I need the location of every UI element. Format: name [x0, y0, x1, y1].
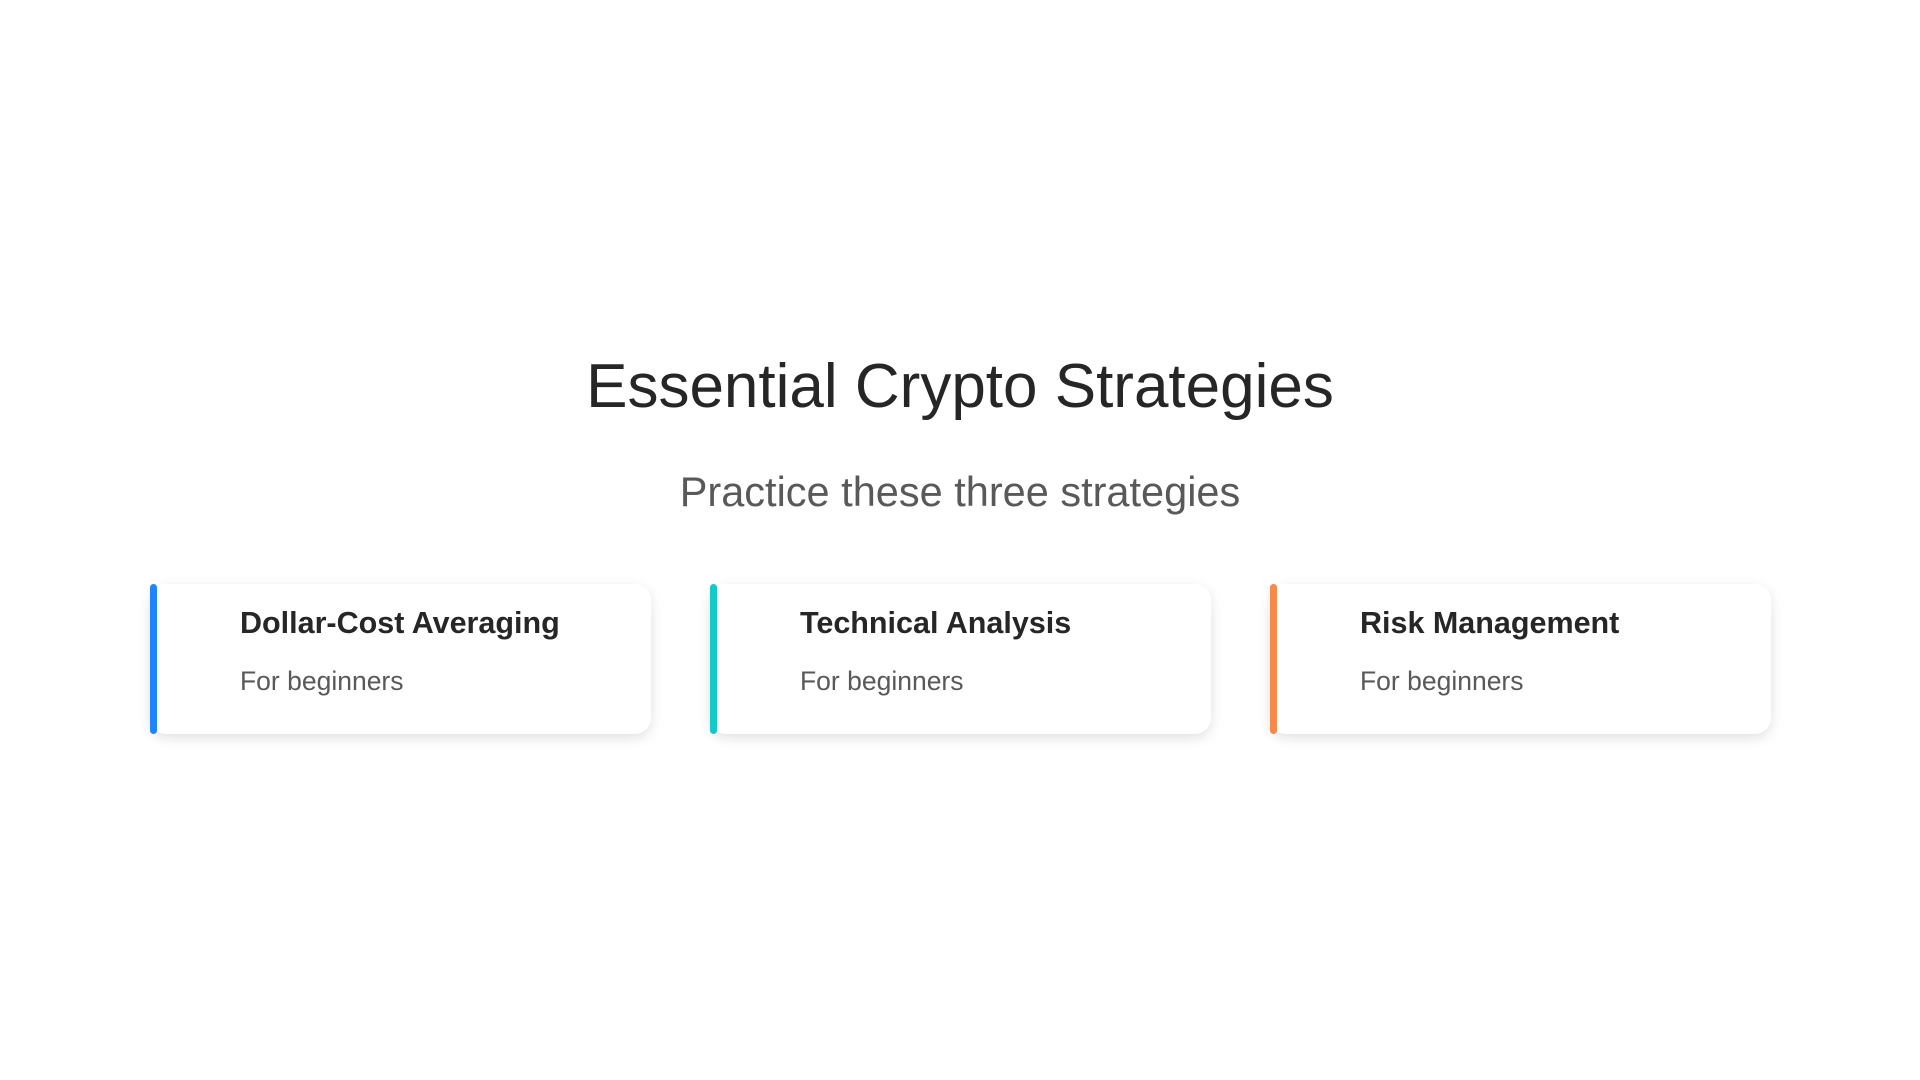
title: Essential Crypto Strategies — [586, 352, 1334, 421]
card subtext: For beginners — [800, 666, 964, 696]
card subtext: For beginners — [1360, 666, 1524, 696]
accent bar: orange — [1270, 584, 1277, 734]
card heading: Dollar-Cost Averaging — [240, 606, 560, 640]
card subtext: For beginners — [240, 666, 404, 696]
card: technical analysis — [710, 584, 1211, 734]
accent bar: blue — [150, 584, 157, 734]
card: risk management — [1270, 584, 1771, 734]
subtitle: Practice these three strategies — [680, 468, 1240, 515]
card: dollar-cost averaging — [150, 584, 651, 734]
card heading: Technical Analysis — [800, 606, 1071, 640]
accent bar: teal — [710, 584, 717, 734]
card heading: Risk Management — [1360, 606, 1619, 640]
